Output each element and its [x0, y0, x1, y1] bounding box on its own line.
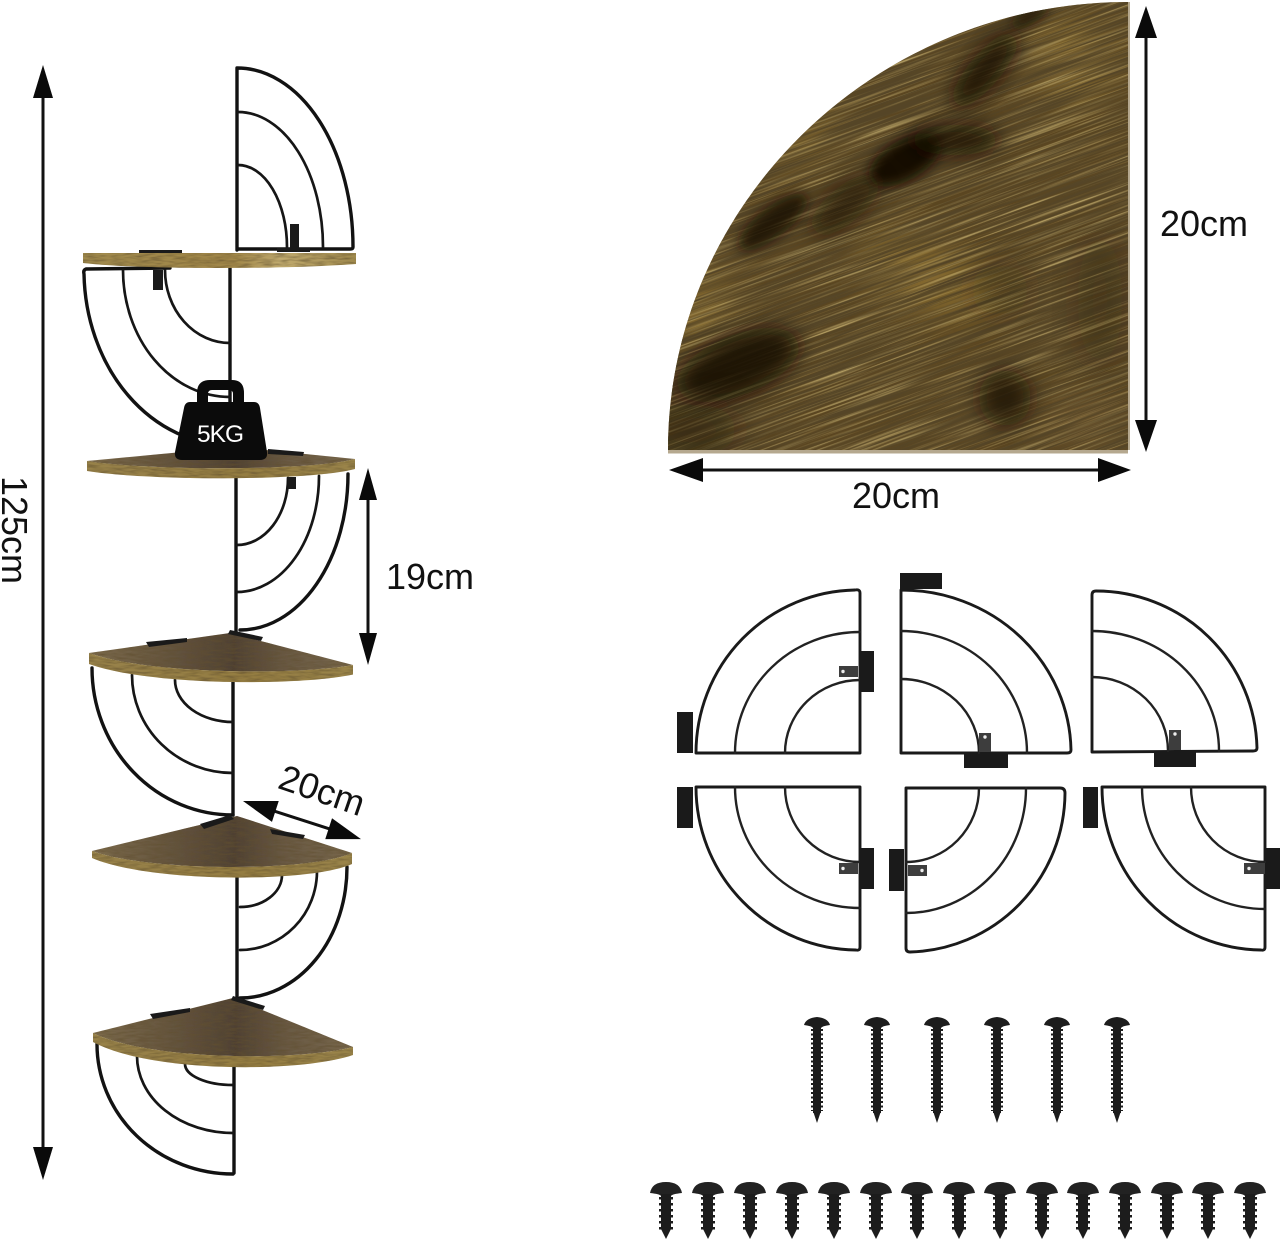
bracket above top shelf — [237, 68, 353, 252]
arrow: panel width — [669, 458, 1131, 482]
short screws — [650, 1182, 1266, 1239]
wood dark knots — [640, 0, 1122, 456]
shelf four — [92, 815, 352, 878]
shelf one seen edge-on — [83, 250, 356, 268]
panel: six metal brackets — [677, 573, 1280, 952]
icon: 5KG weight — [175, 380, 267, 460]
long screws — [804, 1017, 1130, 1123]
bracket: bottom left — [677, 787, 874, 950]
bracket under shelf three — [92, 668, 233, 815]
shelf two — [87, 447, 355, 478]
bracket: bottom right — [1083, 787, 1280, 950]
bracket: top middle — [900, 573, 1071, 768]
arrow: total height — [33, 65, 53, 1180]
bracket under shelf one — [84, 267, 230, 447]
shelf three — [89, 630, 353, 682]
bracket: top left — [677, 590, 874, 753]
arrow: panel height — [1135, 6, 1157, 452]
arrow: shelf spacing — [359, 468, 377, 665]
arrow: shelf depth — [240, 791, 364, 850]
label: 20cm height: 20cm — [1160, 203, 1248, 244]
shelf assembly: five-tier corner shelf with 5KG weight — [83, 68, 356, 1174]
bracket: top right — [1092, 591, 1257, 767]
label: 20cm depth: 20cm — [274, 756, 370, 824]
bracket: bottom middle — [889, 788, 1065, 952]
bracket under shelf five — [97, 1044, 234, 1174]
icon: 5KG weight: 5KG — [197, 421, 243, 448]
wood blotchy tone — [673, 2, 1122, 382]
shelf five — [93, 996, 353, 1067]
wood lit patches — [670, 20, 1130, 445]
label: 20cm width: 20cm — [852, 475, 940, 516]
panel: wood shelf top view — [668, 2, 1242, 954]
label: 19cm: 19cm — [386, 556, 474, 597]
wood grain — [668, 2, 1128, 450]
bracket under shelf four — [237, 867, 347, 1000]
bracket under shelf two — [236, 474, 348, 632]
